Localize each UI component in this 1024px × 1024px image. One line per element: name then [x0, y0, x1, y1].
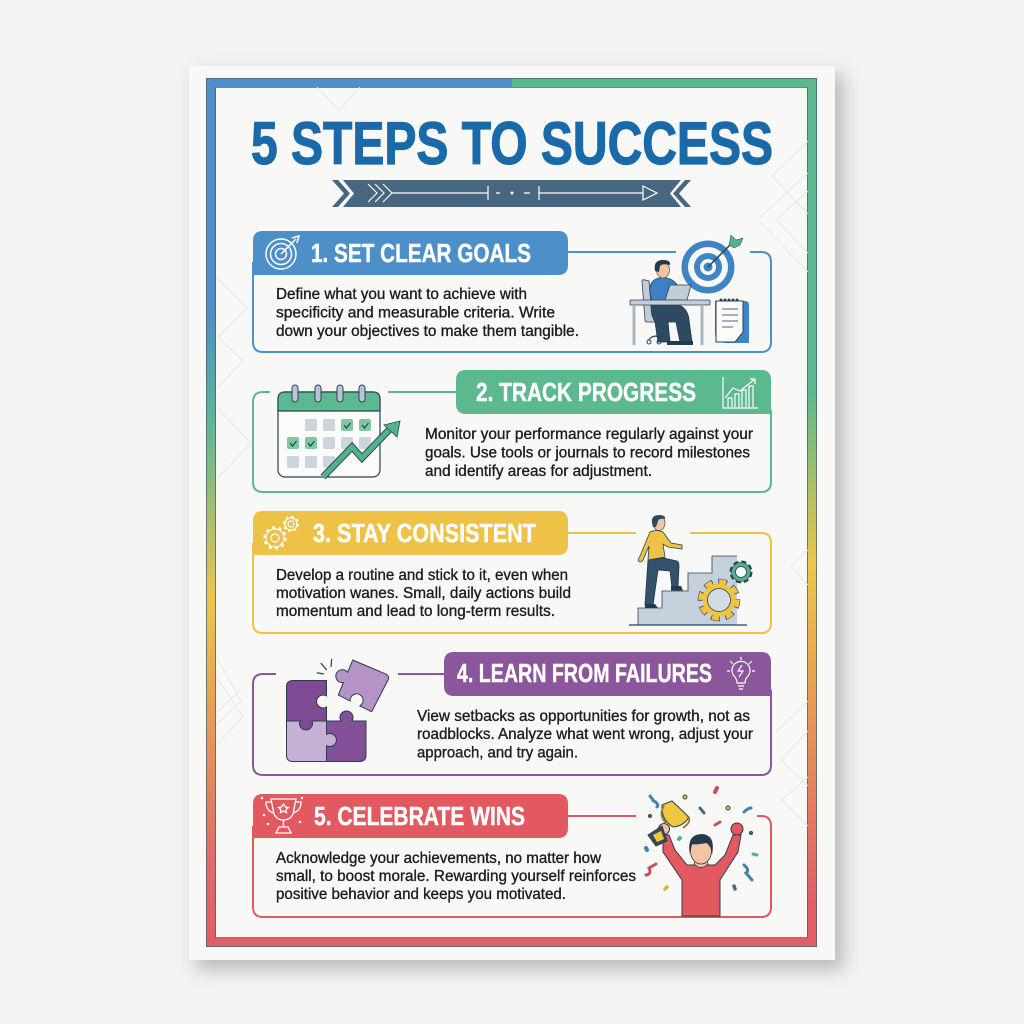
step 3 header [253, 511, 568, 555]
step 4 panel [253, 652, 771, 775]
title: 5 STEPS TO SUCCESS [251, 110, 773, 177]
step 2 heading: 2. TRACK PROGRESS [476, 377, 696, 407]
step 4 text: approach, and try again. [417, 744, 578, 762]
step 2 text: Monitor your performance regularly against your [425, 426, 753, 443]
step 4 text: roadblocks. Analyze what went wrong, adjust your [417, 726, 753, 743]
step 5 panel [253, 788, 771, 917]
icon: person climbing stairs with gears [629, 515, 750, 625]
step 1 text: specificity and measurable criteria. Write [276, 304, 555, 322]
step 1 text [276, 286, 579, 340]
step 5 text [276, 850, 636, 903]
step 5 heading: 5. CELEBRATE WINS [314, 801, 525, 831]
icon: outline trophy [262, 798, 302, 833]
step 4 header [444, 652, 771, 696]
step 2 card outline [253, 392, 771, 492]
step 4 text: View setbacks as opportunities for growth, not as [417, 708, 750, 725]
step 1 panel [253, 231, 771, 352]
step 5 header [253, 794, 568, 838]
icon: light bulb [727, 657, 755, 689]
step 3 text: momentum and lead to long-term results. [276, 603, 555, 620]
step 1 text: down your objectives to make them tangible. [276, 323, 579, 340]
paper sheet [189, 66, 835, 960]
step 3 text: motivation wanes. Small, daily actions build [276, 585, 571, 602]
step 3 panel [253, 511, 771, 633]
decorative border frame [206, 78, 817, 947]
icon: outline gears [264, 517, 298, 548]
step 2 panel [253, 370, 771, 492]
icon: puzzle pieces [286, 659, 389, 762]
title banner with arrow [332, 180, 691, 207]
icon: small growth chart [723, 377, 758, 408]
step 4 text [417, 708, 753, 762]
icon: target outline [266, 236, 299, 269]
step 2 text [425, 426, 753, 480]
step 3 heading: 3. STAY CONSISTENT [313, 518, 536, 548]
step 1 text: Define what you want to achieve with [276, 286, 527, 303]
icon: person at desk with target [630, 235, 749, 345]
step 1 card outline [253, 252, 771, 352]
step 1 header [253, 231, 568, 275]
step 2 text: and identify areas for adjustment. [425, 463, 652, 480]
step 5 text: Acknowledge your achievements, no matter how [276, 850, 602, 867]
step 2 header [456, 370, 771, 414]
step 5 text: positive behavior and keeps you motivated. [276, 886, 566, 903]
step 2 text: goals. Use tools or journals to record milestones [425, 444, 750, 462]
step 1 heading: 1. SET CLEAR GOALS [311, 238, 531, 268]
step 3 text: Develop a routine and stick to it, even when [276, 567, 568, 584]
icon: calendar with rising arrow [278, 385, 400, 477]
step 3 text [276, 567, 571, 620]
step 3 card outline [253, 533, 771, 633]
step 5 card outline [253, 816, 771, 917]
step 5 text: small, to boost morale. Rewarding yourself reinforces [276, 868, 636, 885]
step 4 card outline [253, 674, 771, 775]
icon: person celebrating with trophy and confetti [646, 788, 757, 916]
step 4 heading: 4. LEARN FROM FAILURES [457, 658, 712, 688]
